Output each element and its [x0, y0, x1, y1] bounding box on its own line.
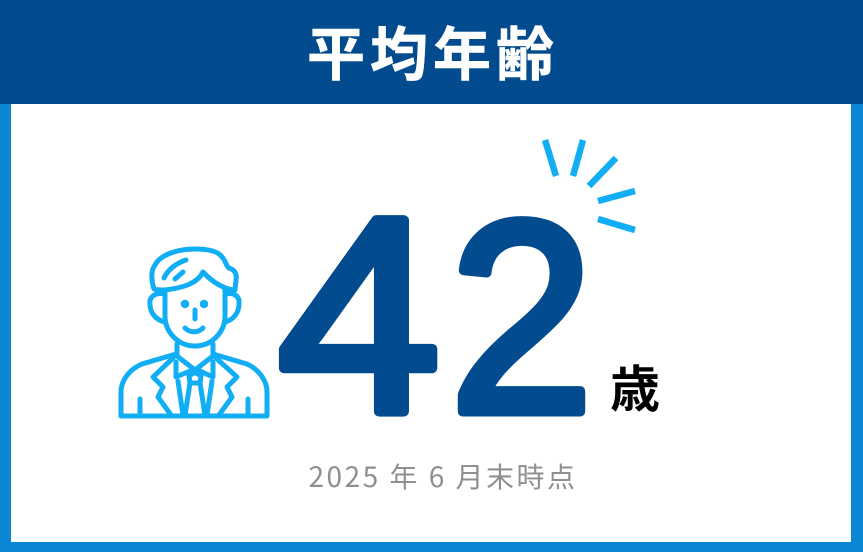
- big number 42: 2: [450, 165, 594, 470]
- unit: age: 歳: [610, 350, 660, 422]
- icon: sparkle lines: [545, 140, 635, 230]
- date note: 2025 年 6 月末時点: [308, 456, 578, 496]
- heading: title: 平均年齢: [307, 8, 559, 92]
- panel: title banner: [0, 0, 863, 104]
- big number 42: [278, 159, 594, 471]
- big number 42: 4: [278, 159, 441, 471]
- icon: businessman: [121, 249, 267, 416]
